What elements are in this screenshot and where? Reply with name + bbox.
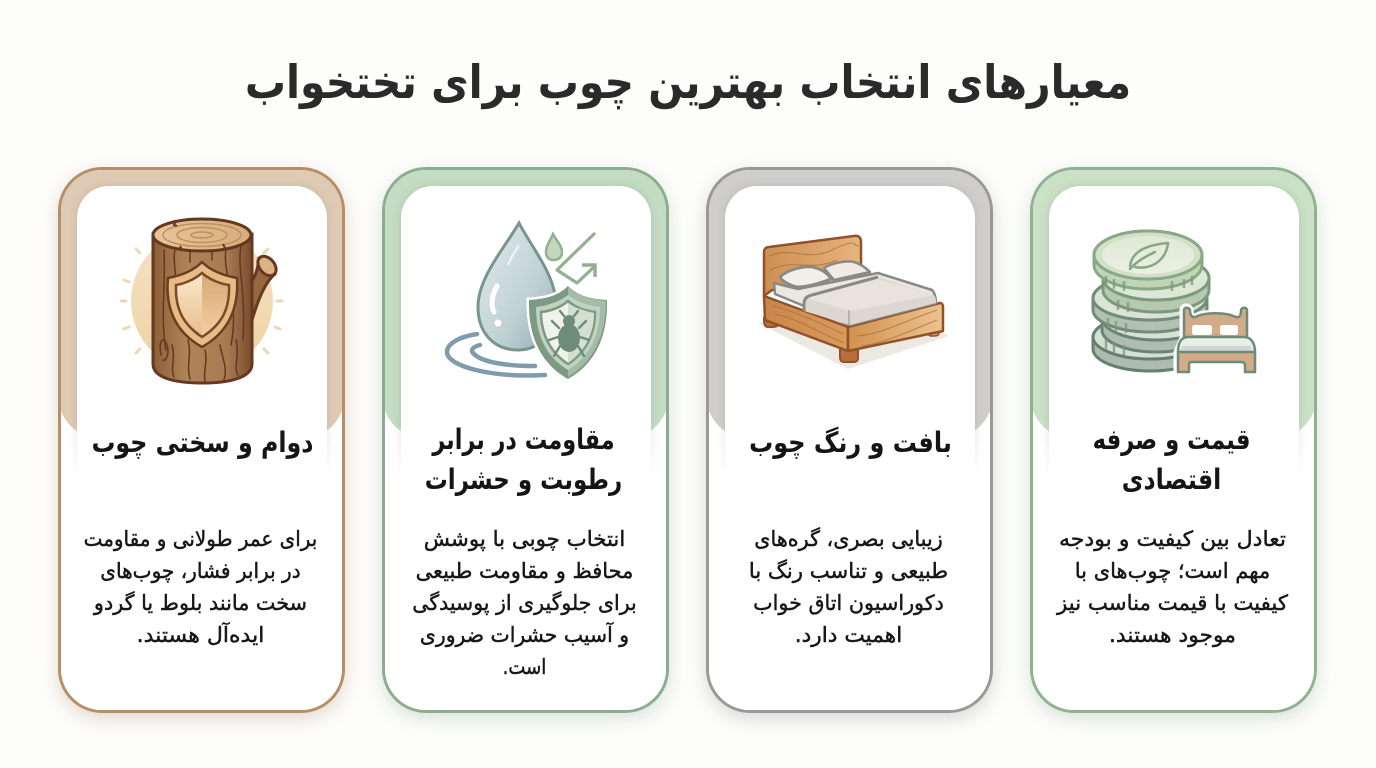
heading: رطوبت و حشرات <box>425 463 622 496</box>
text block <box>749 526 948 648</box>
heading <box>425 423 622 496</box>
text block: دکوراسیون اتاق خواب <box>753 591 944 615</box>
text block: انتخاب چوبی با پوشش <box>424 527 625 551</box>
text block: است. <box>503 655 546 679</box>
text block: زیبایی بصری، گره‌های <box>754 527 943 551</box>
heading: مقاومت در برابر <box>432 423 615 456</box>
text block: سخت مانند بلوط یا گردو <box>94 591 307 615</box>
text block: محافظ و مقاومت طبیعی <box>416 559 633 583</box>
text block <box>84 527 317 647</box>
heading: قیمت و صرفه <box>1093 423 1250 456</box>
text block: ایده‌آل هستند. <box>137 623 264 647</box>
text block: کیفیت با قیمت مناسب نیز <box>1057 591 1288 615</box>
icon: wooden bed <box>758 234 948 369</box>
icon: wooden log with shield <box>120 218 284 384</box>
text block: در برابر فشار، چوب‌های <box>100 559 301 583</box>
heading: اقتصادی <box>1122 463 1221 496</box>
text block: طبیعی و تناسب رنگ با <box>749 559 948 583</box>
text block: برای عمر طولانی و مقاومت <box>84 527 317 551</box>
text block: تعادل بین کیفیت و بودجه <box>1059 527 1286 551</box>
panel: grain and wood colour <box>706 167 993 713</box>
icon: water drop and shield with bug <box>444 220 608 379</box>
panel: moisture and insect resistance <box>382 167 669 713</box>
text block: و آسیب حشرات ضروری <box>420 623 629 647</box>
icon: coin stack with bed <box>1092 230 1256 374</box>
heading: بافت و رنگ چوب <box>749 426 952 459</box>
text block <box>1056 527 1288 648</box>
panel: durability and hardness <box>58 167 345 713</box>
text block: برای جلوگیری از پوسیدگی <box>412 591 637 615</box>
heading: دوام و سختی چوب <box>92 426 313 459</box>
text block: مهم است؛ چوب‌های با <box>1075 559 1270 583</box>
heading <box>1093 423 1250 496</box>
panel: price and value <box>1030 167 1317 713</box>
text block: موجود هستند. <box>1109 623 1236 647</box>
text block: اهمیت دارد. <box>795 623 902 647</box>
text block <box>412 527 637 679</box>
title: معیارهای انتخاب بهترین چوب برای تختخواب <box>245 55 1131 109</box>
